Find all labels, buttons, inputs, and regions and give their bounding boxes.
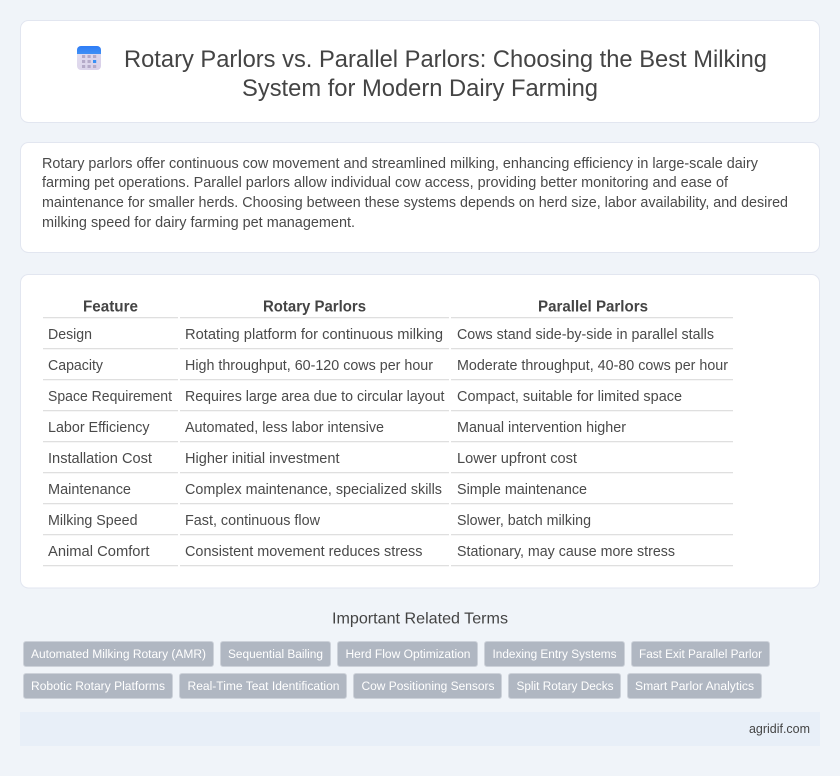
tag: Cow Positioning Sensors — [362, 679, 494, 693]
title: Rotary Parlors vs. Parallel Parlors: Choosing the Best Milking — [124, 46, 767, 73]
title: System for Modern Dairy Farming — [242, 75, 598, 102]
row: installation cost: Installation Cost — [48, 451, 152, 467]
tag — [354, 674, 502, 698]
tag: Automated Milking Rotary (AMR) — [31, 647, 206, 661]
text block: summary: milking speed for dairy farming pet management. — [42, 215, 355, 231]
row: design: Cows stand side-by-side in parallel stalls — [457, 327, 714, 343]
row: milking speed: Milking Speed — [48, 513, 138, 529]
tag — [338, 642, 478, 666]
row: maintenance — [48, 482, 587, 498]
row: design: Rotating platform for continuous milking — [185, 327, 443, 343]
row: animal comfort: Consistent movement reduces stress — [185, 544, 422, 560]
row: space requirement: Compact, suitable for limited space — [457, 389, 682, 405]
row: installation cost: Lower upfront cost — [457, 451, 577, 467]
row: maintenance: Maintenance — [48, 482, 131, 498]
table header — [83, 298, 648, 316]
tag: Indexing Entry Systems — [492, 647, 616, 661]
row: design — [48, 327, 714, 343]
row: milking speed: Slower, batch milking — [457, 513, 591, 529]
row: capacity — [48, 358, 728, 374]
text block: summary: maintenance for smaller herds. Choosing between these systems depends on herd size, labor availability, and desired — [42, 195, 788, 211]
title — [124, 46, 767, 102]
row: animal comfort: Stationary, may cause more stress — [457, 544, 675, 560]
tag — [628, 674, 762, 698]
tag — [484, 642, 624, 666]
tag — [24, 674, 172, 698]
tag — [632, 642, 770, 666]
row: installation cost — [48, 451, 577, 467]
tag — [24, 642, 214, 666]
row: maintenance: Simple maintenance — [457, 482, 587, 498]
icon: calendar — [77, 46, 101, 70]
table header: Parallel Parlors — [538, 298, 648, 316]
row: installation cost: Higher initial investment — [185, 451, 340, 467]
tag: Real-Time Teat Identification — [188, 679, 340, 693]
panel: header — [20, 20, 820, 122]
row: labor efficiency: Labor Efficiency — [48, 420, 150, 436]
footer bar — [20, 712, 820, 746]
tag: Fast Exit Parallel Parlor — [639, 647, 762, 661]
tag — [220, 642, 330, 666]
row: animal comfort — [48, 544, 675, 560]
row: capacity: Capacity — [48, 358, 104, 374]
tag: Split Rotary Decks — [516, 679, 614, 693]
tag — [180, 674, 346, 698]
row: space requirement: Space Requirement — [48, 389, 172, 405]
panel: comparison table — [20, 274, 820, 588]
row: design: Design — [48, 327, 92, 343]
row: space requirement: Requires large area due to circular layout — [185, 389, 444, 405]
row: labor efficiency: Automated, less labor intensive — [185, 420, 384, 436]
text block: summary: farming pet operations. Parallel parlors allow individual cow access, providing better monitoring and ease of — [42, 175, 729, 191]
table header: Rotary Parlors — [263, 298, 366, 316]
panel: summary paragraph — [20, 142, 820, 252]
tag: Sequential Bailing — [228, 647, 323, 661]
footer text: source: agridif.com — [749, 721, 810, 736]
table header: Feature — [83, 298, 138, 316]
tags: related terms — [24, 642, 770, 698]
row: labor efficiency — [48, 420, 626, 436]
heading: related terms: Important Related Terms — [332, 610, 508, 628]
tag: Robotic Rotary Platforms — [31, 679, 165, 693]
tag: Smart Parlor Analytics — [635, 679, 754, 693]
row: capacity: Moderate throughput, 40-80 cows per hour — [457, 358, 728, 374]
row: capacity: High throughput, 60-120 cows per hour — [185, 358, 433, 374]
text block: summary: Rotary parlors offer continuous cow movement and streamlined milking, enhancing efficiency in large-scale dairy — [42, 156, 759, 172]
row: milking speed — [48, 513, 591, 529]
tag — [508, 674, 620, 698]
row: milking speed: Fast, continuous flow — [185, 513, 321, 529]
row: space requirement — [48, 389, 682, 405]
row: animal comfort: Animal Comfort — [48, 544, 150, 560]
text block: summary — [42, 156, 788, 231]
tag: Herd Flow Optimization — [346, 647, 471, 661]
row: labor efficiency: Manual intervention higher — [457, 420, 626, 436]
row: maintenance: Complex maintenance, specialized skills — [185, 482, 442, 498]
